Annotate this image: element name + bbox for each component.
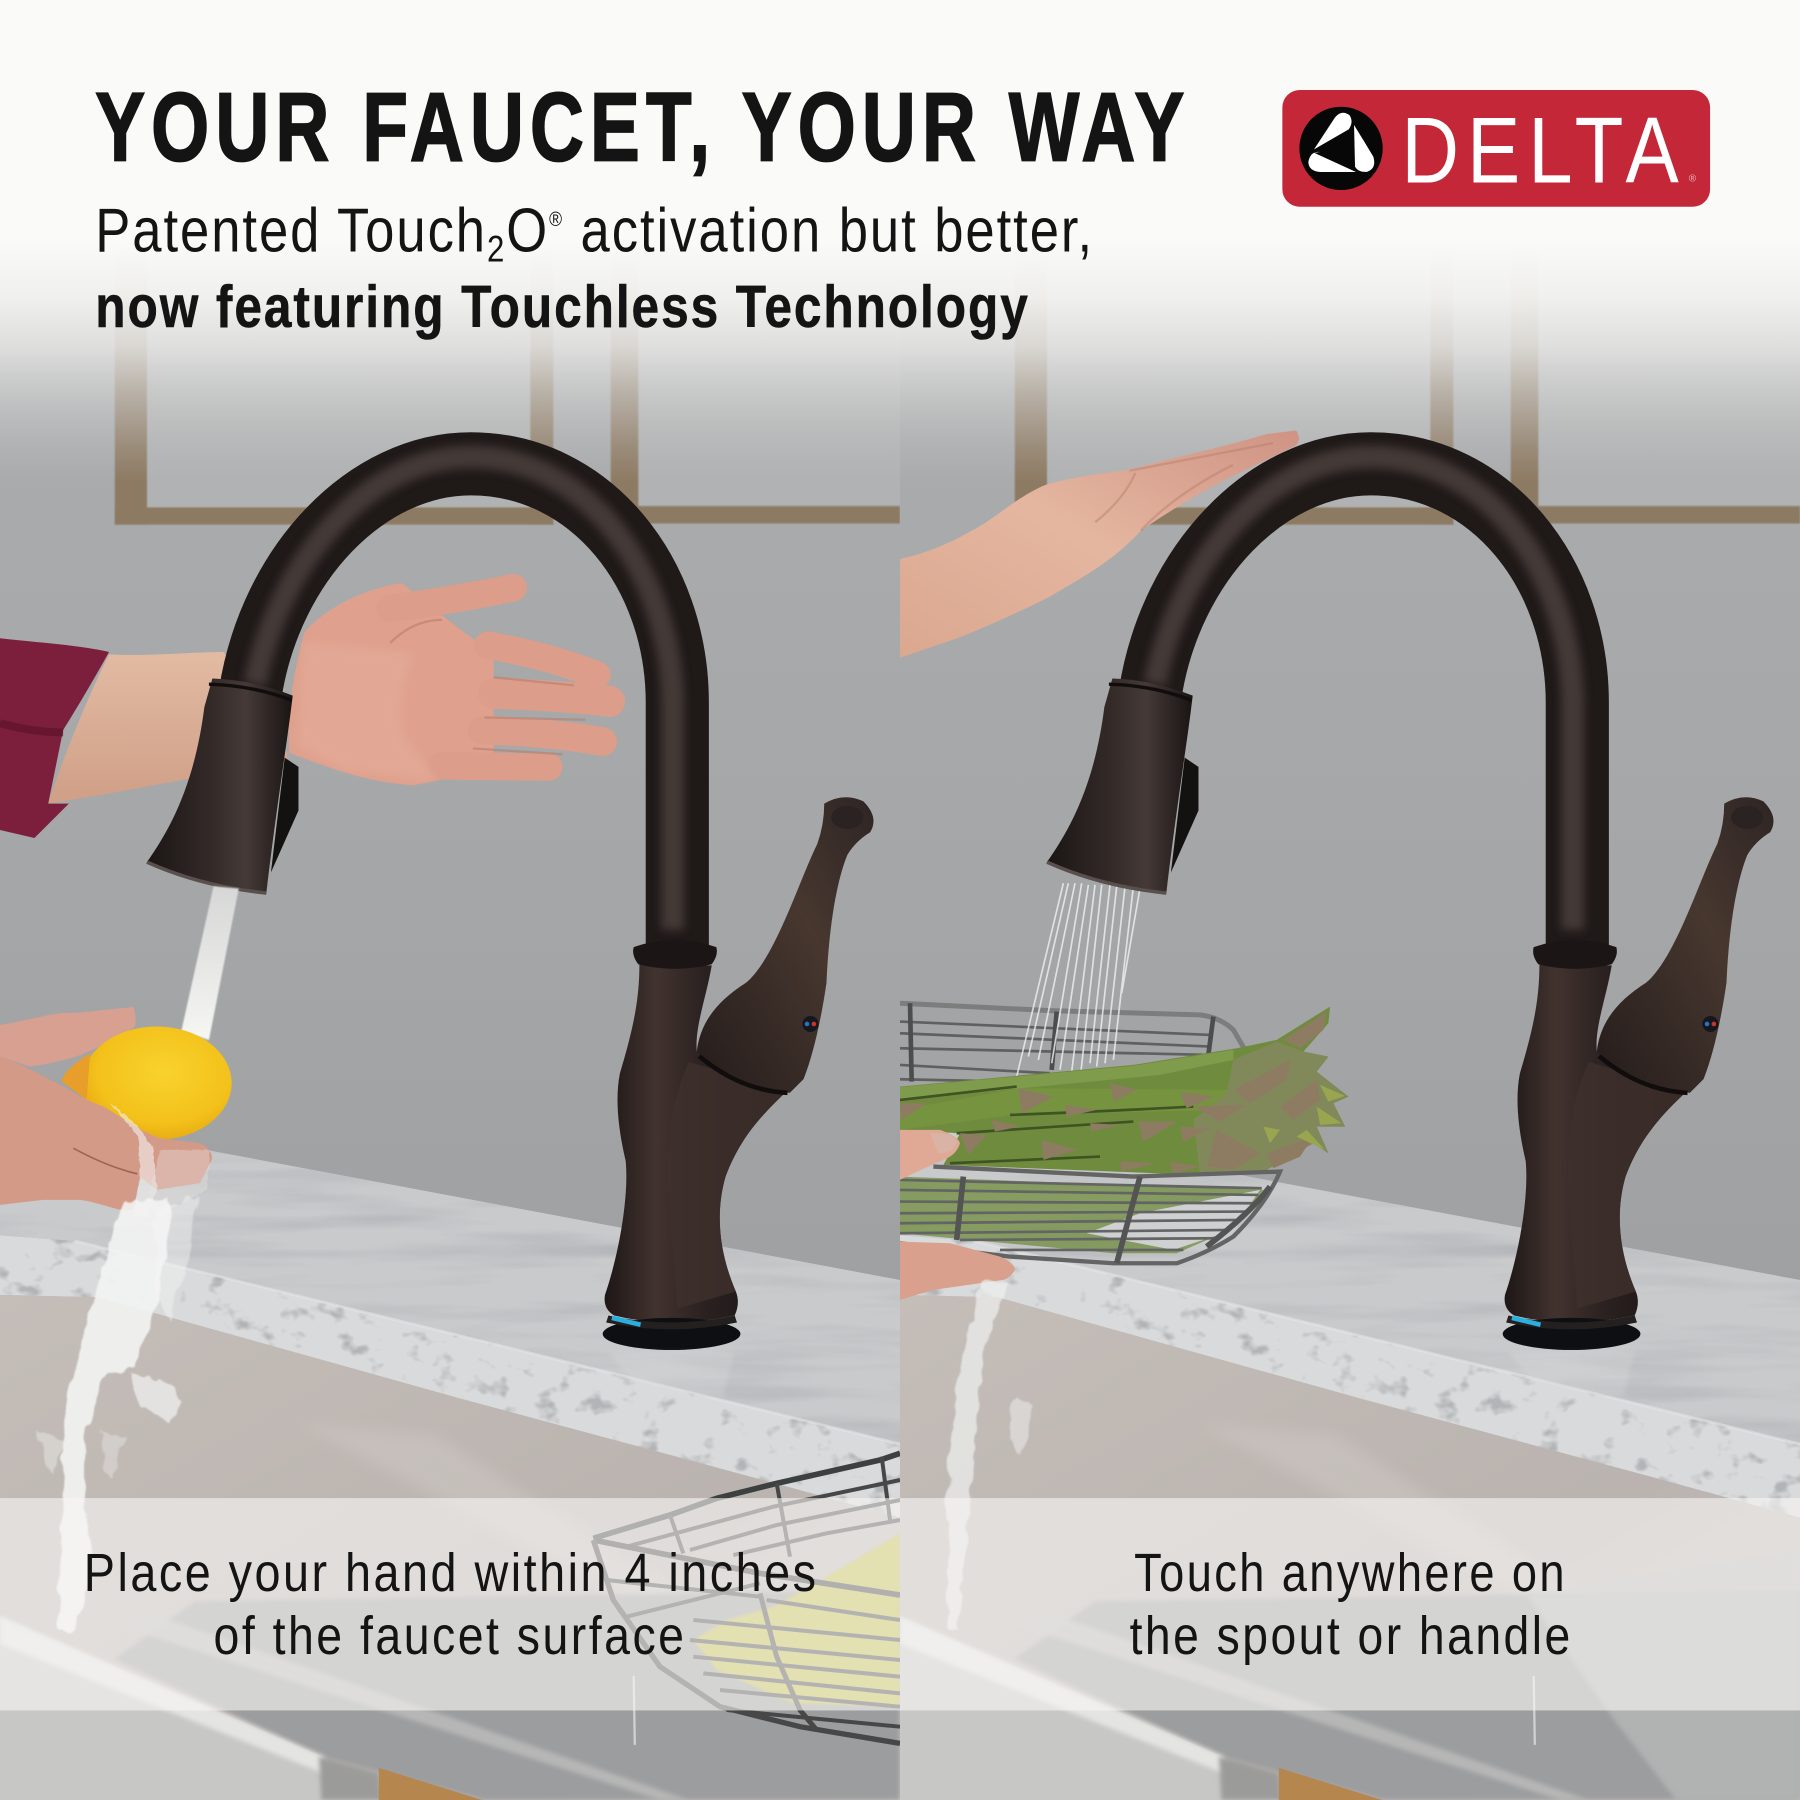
kitchen background: wall, frames, counter and sink (900, 302, 1800, 1800)
marble reflection (1607, 1710, 1799, 1799)
wall fade at top (0, 0, 900, 482)
caption right: Touch anywhere on (1134, 1543, 1567, 1603)
forearm (48, 652, 287, 804)
caption left (84, 1543, 818, 1666)
lower wire basket (900, 1167, 1280, 1263)
panel: right, touching faucet (900, 274, 1800, 1800)
title: YOUR FAUCET, YOUR WAY (95, 73, 1190, 182)
basket and asparagus (900, 883, 1348, 1300)
kitchen background: wall, frames, counter and sink (0, 302, 900, 1800)
wire basket with food in sink (593, 1453, 900, 1743)
water stream (181, 886, 239, 1040)
holding hand (0, 1056, 212, 1210)
caption left: of the faucet surface (214, 1606, 686, 1666)
spray water (1017, 883, 1140, 1080)
caption right: the spout or handle (1130, 1606, 1573, 1666)
panel: left, hand near faucet (0, 274, 900, 1800)
upper wire basket (900, 1003, 1244, 1082)
sleeve (0, 638, 109, 838)
subtitle line 1: 2 (487, 229, 506, 270)
registered mark: ® (1689, 174, 1697, 185)
icon: Delta triangle mark (1299, 107, 1383, 190)
water over hand (110, 1104, 158, 1202)
asparagus bunch (900, 1007, 1348, 1175)
logo wordmark: DELTA (1401, 98, 1687, 202)
hands and lemon (0, 1007, 232, 1217)
wall fade at top (900, 0, 1800, 482)
water falling into sink (948, 1280, 1035, 1630)
lower hand fingers (900, 1130, 1015, 1300)
touching hand (900, 430, 1299, 658)
caption band left and right (0, 1498, 1800, 1710)
caption right (1130, 1543, 1573, 1666)
logo: Delta (1282, 90, 1710, 207)
subtitle line 2: now featuring Touchless Technology (95, 273, 1030, 340)
faucet (147, 457, 873, 1396)
subtitle line 1: O (506, 196, 549, 265)
water falling into sink (37, 1194, 197, 1630)
faucet (1047, 457, 1773, 1396)
upper hand (0, 1007, 136, 1066)
subtitle line 1: activation but better, (564, 196, 1094, 265)
subtitle line 1: ® (549, 208, 564, 231)
open hand (289, 583, 610, 785)
caption left: Place your hand within 4 inches (84, 1543, 818, 1603)
lemon (82, 1026, 232, 1140)
subtitle line 1: Patented Touch (95, 196, 557, 265)
